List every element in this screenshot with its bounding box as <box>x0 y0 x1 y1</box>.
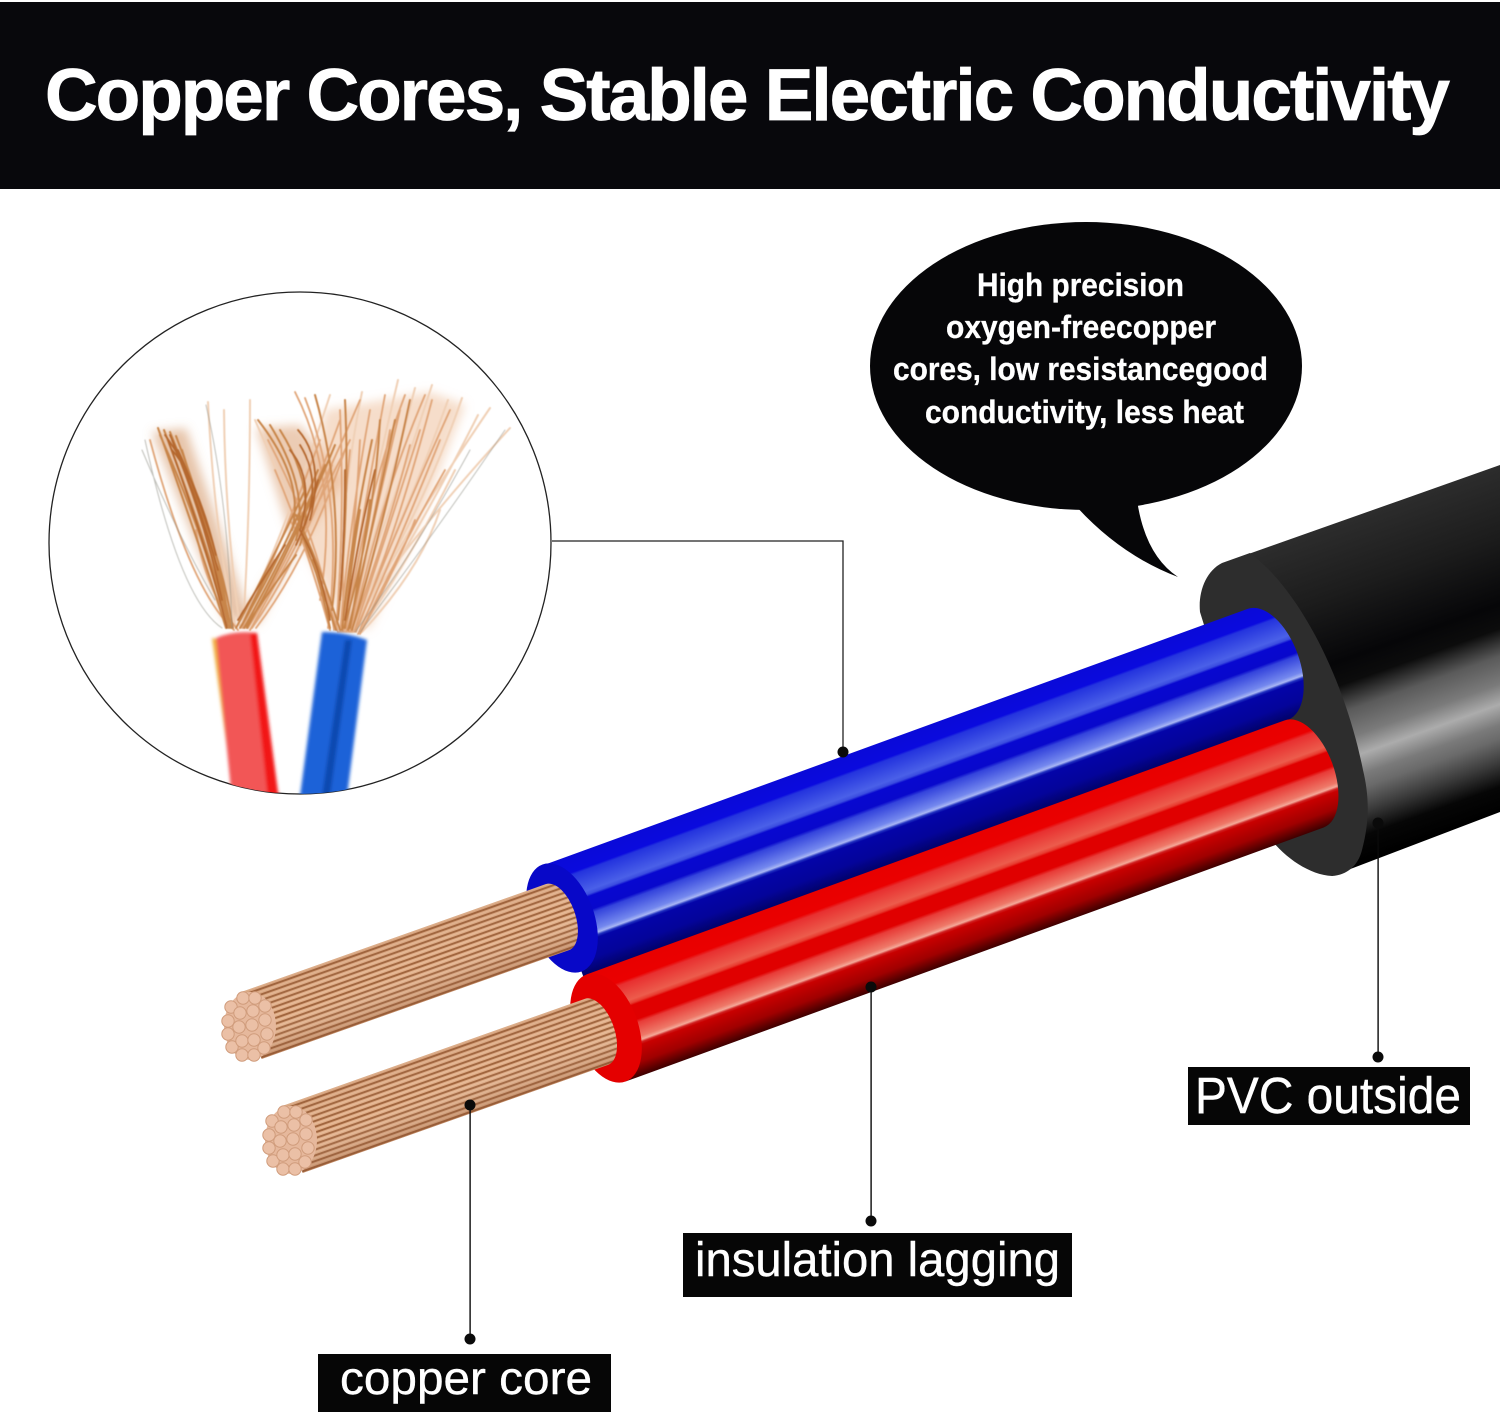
icon: frayed copper strands <box>142 380 510 634</box>
label: insulation lagging: insulation lagging <box>695 1234 1060 1287</box>
leader: inset to blue wire <box>552 541 843 752</box>
cable: black PVC jacket <box>1200 465 1500 876</box>
label: copper core: copper core <box>340 1352 592 1404</box>
callout leader: insulation lagging <box>866 982 876 1226</box>
icon: red wire stub <box>212 632 279 800</box>
bubble text: oxygen-freecopper <box>946 309 1216 345</box>
callout leader: copper core <box>464 1100 476 1344</box>
bubble text: cores, low resistancegood <box>893 351 1268 387</box>
speech bubble <box>870 222 1302 577</box>
header banner <box>0 2 1500 189</box>
copper conductor: lower <box>241 987 627 1192</box>
bubble text: High precision <box>977 267 1184 303</box>
copper conductor: upper <box>200 872 588 1078</box>
callout leader: PVC outside <box>1372 818 1384 1062</box>
icon: blue wire stub <box>300 632 367 796</box>
label: PVC outside: PVC outside <box>1195 1067 1461 1124</box>
cable: blue insulated core <box>512 597 1318 987</box>
bubble text <box>893 267 1268 430</box>
inset circle: frayed wire photo <box>49 292 551 800</box>
bubble text: conductivity, less heat <box>925 394 1244 430</box>
cable: red insulated core <box>556 710 1352 1093</box>
title: Copper Cores, Stable Electric Conductivity <box>45 55 1450 136</box>
leader dot: blue wire <box>838 746 848 758</box>
